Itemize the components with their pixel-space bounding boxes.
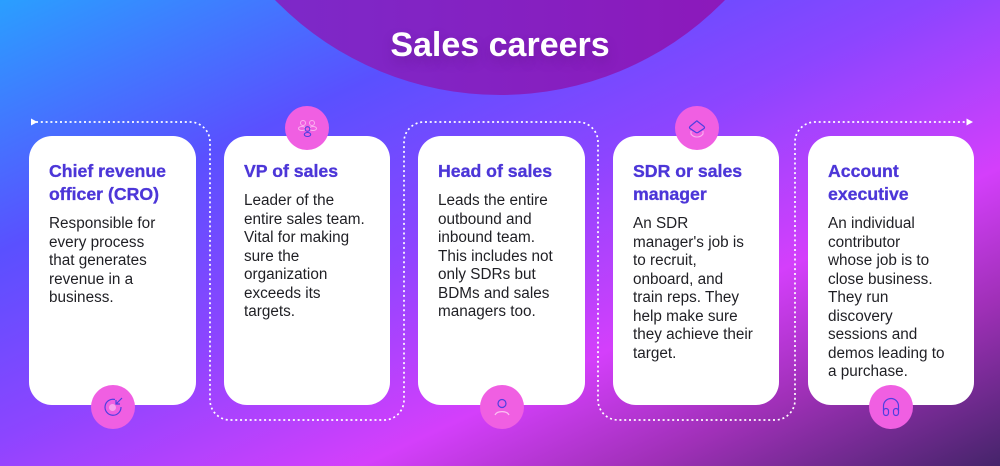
panel: account executive: They run xyxy=(828,289,888,306)
panel: account executive: discovery xyxy=(828,308,893,324)
panel: SDR or sales manager: they achieve their xyxy=(633,326,753,343)
panel: chief revenue officer: that generates xyxy=(49,252,147,269)
panel: SDR or sales manager: target. xyxy=(633,344,676,362)
panel: chief revenue officer: revenue in a xyxy=(49,270,133,288)
panel: head of sales xyxy=(418,136,585,405)
panel: head of sales: outbound and xyxy=(438,210,532,228)
panel: head of sales: Leads the entire xyxy=(438,192,548,209)
panel: account executive: executive xyxy=(828,184,909,204)
panel: SDR or sales manager: help make sure xyxy=(633,308,738,324)
panel: SDR or sales manager: onboard, and xyxy=(633,270,723,288)
panel: SDR or sales manager xyxy=(613,136,779,405)
panel: VP of sales: targets. xyxy=(244,303,295,320)
panel: account executive: Account xyxy=(828,160,899,180)
title arc background xyxy=(275,0,725,95)
panel: chief revenue officer: officer (CRO) xyxy=(49,184,159,204)
panel: head of sales: Head of sales xyxy=(438,160,552,180)
panel: VP of sales xyxy=(224,136,390,405)
title: Sales careers xyxy=(390,26,610,64)
panel: VP of sales: exceeds its xyxy=(244,284,321,302)
panel: VP of sales: VP of sales xyxy=(244,160,338,180)
panel: account executive: sessions and xyxy=(828,326,917,343)
panel: head of sales: only SDRs but xyxy=(438,266,536,283)
panel: chief revenue officer: every process xyxy=(49,234,144,250)
panel: VP of sales: Vital for making xyxy=(244,229,349,246)
panel: chief revenue officer: business. xyxy=(49,289,114,306)
panel: account executive: contributor xyxy=(828,234,900,250)
panel: SDR or sales manager: An SDR xyxy=(633,215,688,232)
panel: account executive: demos leading to xyxy=(828,344,945,362)
panel: VP of sales: entire sales team. xyxy=(244,210,365,228)
panel: account executive: An individual xyxy=(828,215,915,232)
panel: SDR or sales manager: SDR or sales xyxy=(633,160,742,180)
icon: person xyxy=(480,385,524,429)
panel: SDR or sales manager: manager's job is xyxy=(633,234,744,250)
panel: account executive: whose job is to xyxy=(828,252,929,269)
icon: revenue cycle xyxy=(91,385,135,429)
panel: account executive: close business. xyxy=(828,270,933,288)
panel: head of sales: BDMs and sales xyxy=(438,284,549,302)
panel: VP of sales: sure the xyxy=(244,248,299,264)
panel: SDR or sales manager: manager xyxy=(633,184,707,204)
icon: team xyxy=(285,106,329,150)
icon: graduation cap xyxy=(675,106,719,150)
panel: SDR or sales manager: train reps. They xyxy=(633,289,739,306)
panel: VP of sales: organization xyxy=(244,266,327,283)
icon: headset xyxy=(869,385,913,429)
panel: head of sales: managers too. xyxy=(438,303,536,320)
panel: account executive xyxy=(808,136,974,405)
panel: SDR or sales manager: to recruit, xyxy=(633,252,697,269)
panel: chief revenue officer: Chief revenue xyxy=(49,160,166,180)
panel: head of sales: inbound team. xyxy=(438,229,535,246)
panel: account executive: a purchase. xyxy=(828,363,908,380)
panel: head of sales: This includes not xyxy=(438,248,553,264)
panel: chief revenue officer xyxy=(29,136,196,405)
panel: chief revenue officer: Responsible for xyxy=(49,215,155,232)
panel: VP of sales: Leader of the xyxy=(244,192,334,209)
